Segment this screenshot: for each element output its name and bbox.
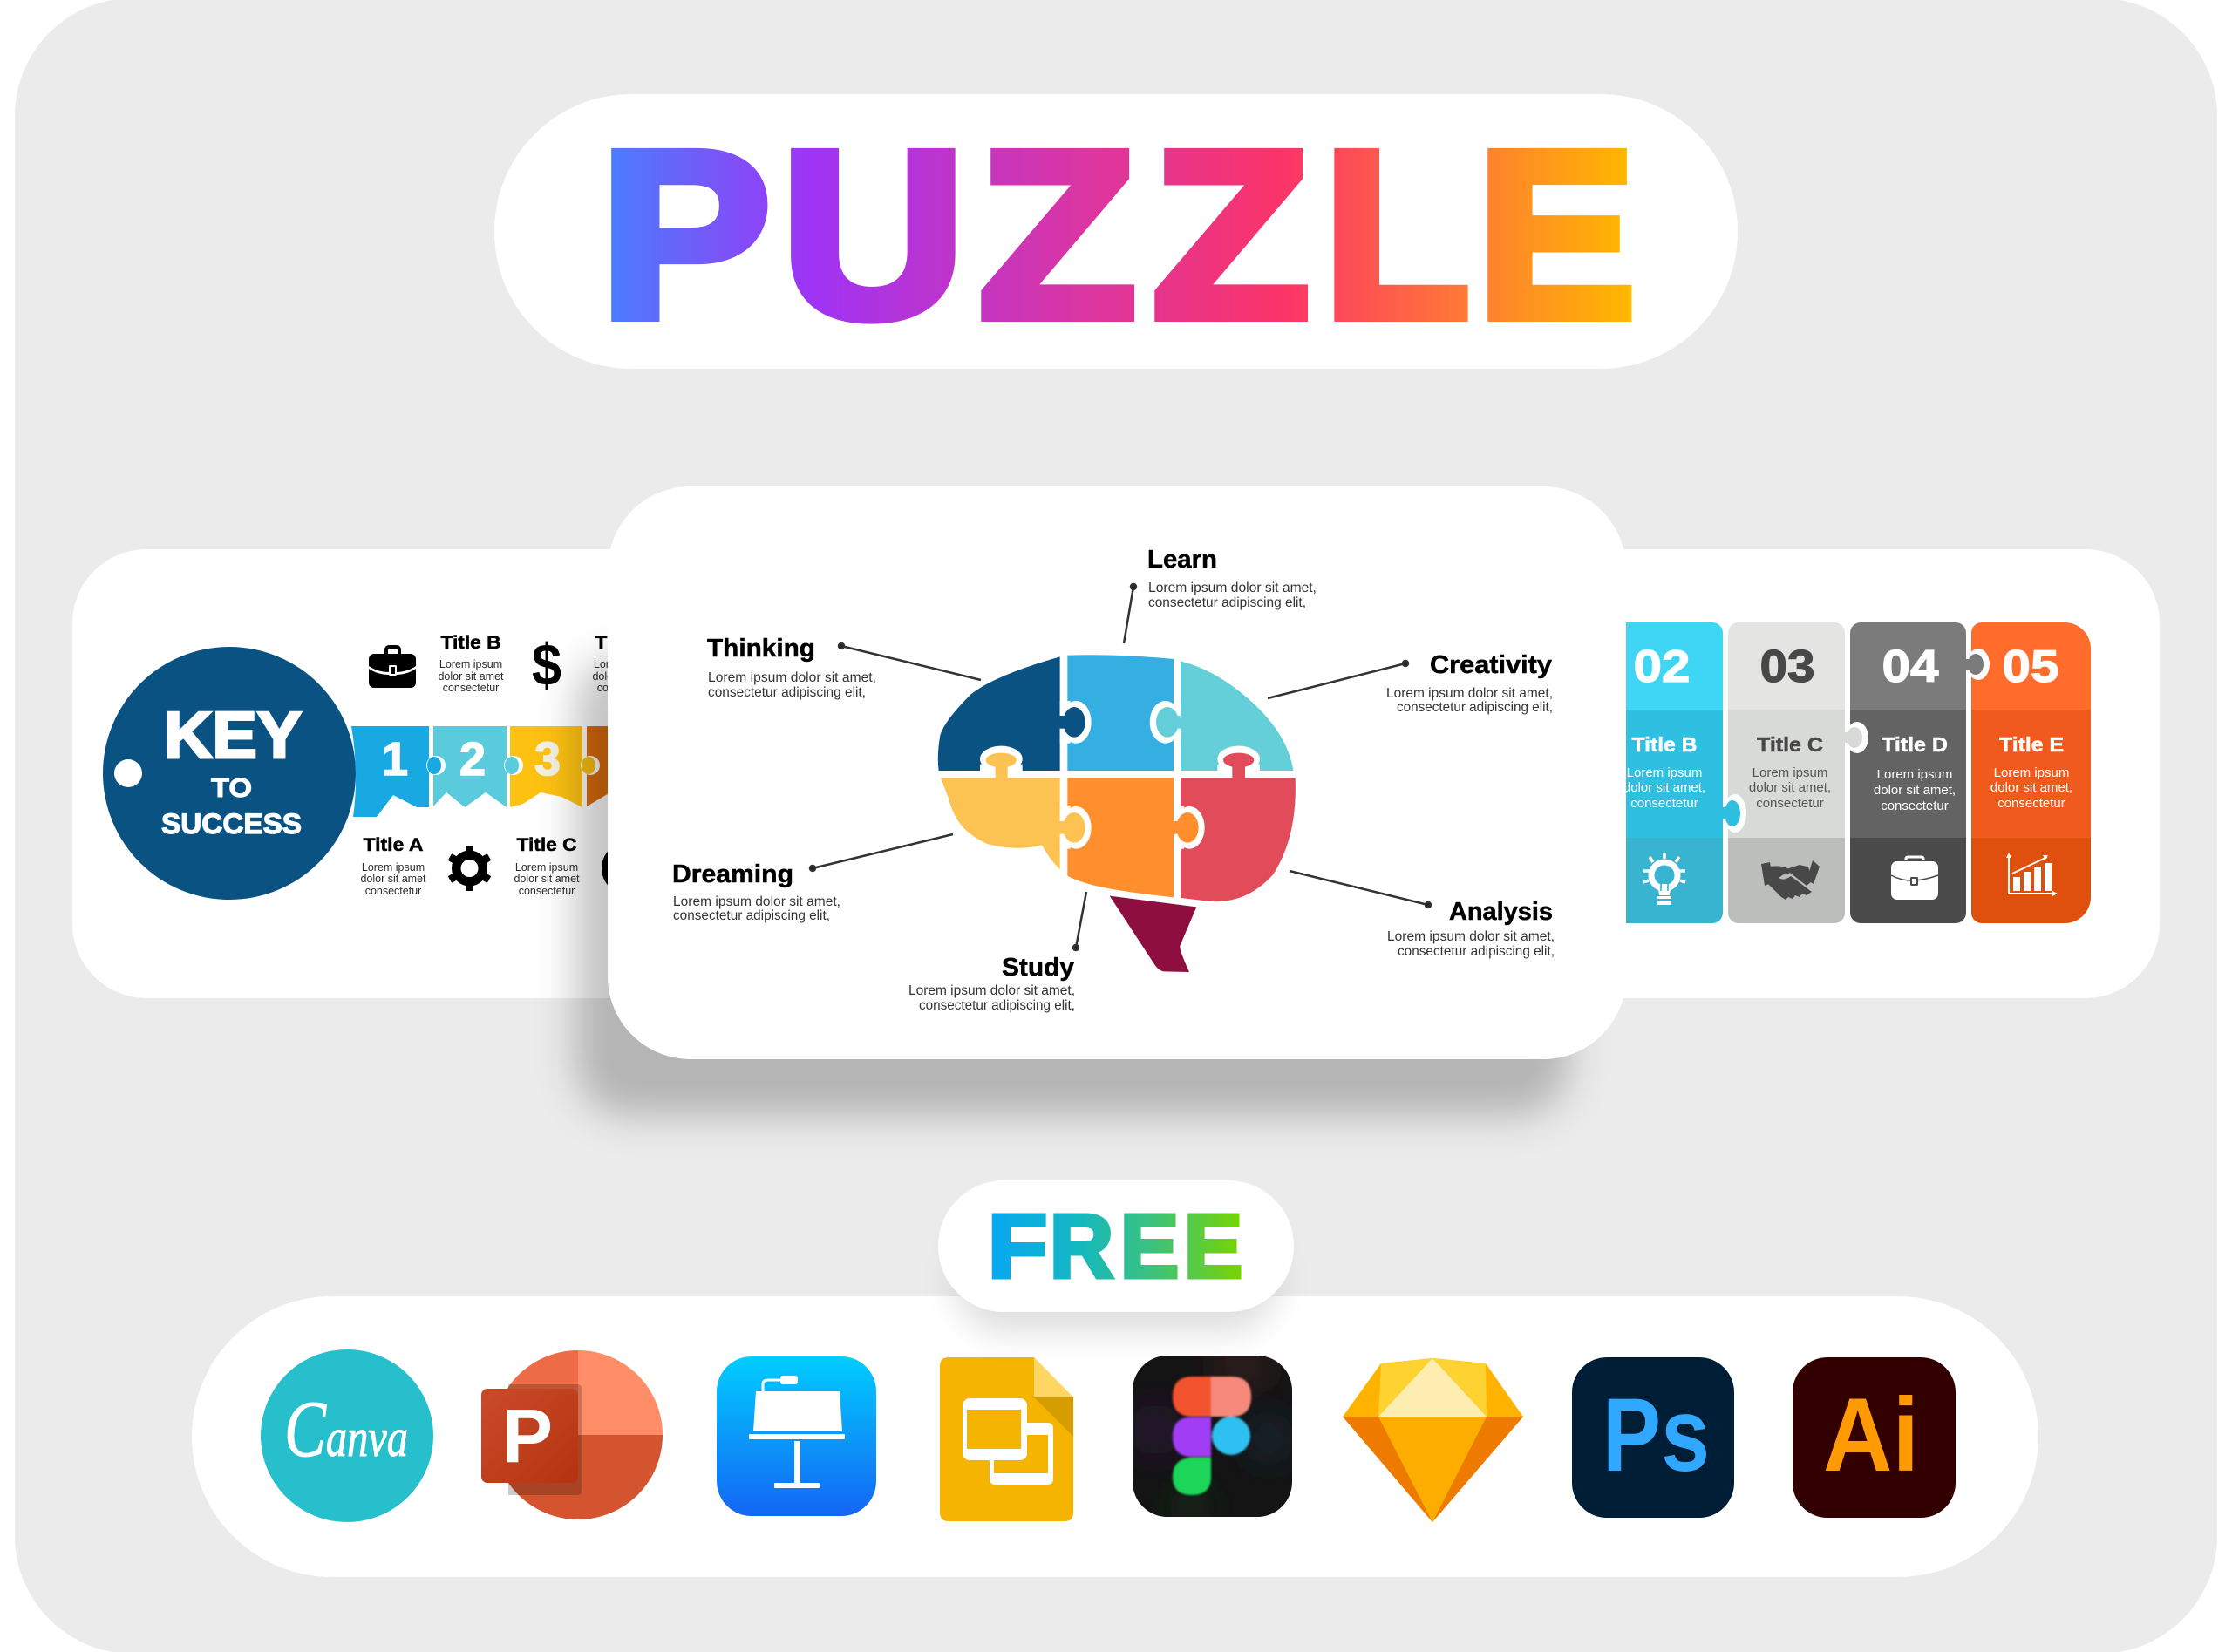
icon: briefcase [369,645,416,688]
text: title B: consectetur [443,682,499,694]
icon: illustrator: Ai [1823,1377,1919,1493]
column 04 [1850,622,1966,923]
column 04: dolor sit amet, [1874,783,1956,798]
text: title B: Title B [441,633,500,653]
key teeth puzzle pieces: 2 [459,733,486,785]
panel: numbered puzzle columns [1395,549,2160,998]
leader lines [810,584,1431,950]
knob 03 to 04 [1843,722,1868,753]
label: study [908,954,1075,1013]
column 05: Title E [1999,733,2064,756]
brain piece: orange [1067,778,1174,897]
text: title A: Title A [363,835,424,855]
column 05: 05 [2002,642,2059,692]
text: title B [438,633,504,694]
label: dreaming: Lorem ipsum dolor sit amet, [673,894,840,909]
icon: sketch [1343,1358,1523,1522]
label: learn: consectetur adipiscing elit, [1148,595,1306,610]
knob: yellow to navy [980,746,1023,780]
column 04: Lorem ipsum [1877,767,1952,782]
text: title A: Lorem ipsum [362,861,425,874]
label: study: consectetur adipiscing elit, [919,998,1075,1013]
icon: dollar: $ [532,632,561,698]
text: title B: Lorem ipsum [439,658,502,670]
text: title D: Lorem ipsum [594,658,657,670]
icon: illustrator [1793,1357,1956,1518]
free pill [938,1180,1294,1312]
column 02: Title B [1632,733,1697,756]
column 05 [1971,622,2091,923]
label: analysis: Lorem ipsum dolor sit amet, [1387,929,1555,944]
column 02: consectetur [1630,796,1698,811]
free label: E [1120,1196,1179,1296]
label: thinking [707,635,876,700]
panel: brain puzzle card [608,486,1626,1059]
text: title B: dolor sit amet [438,670,504,683]
text: title D: Title D [595,633,656,653]
icon: photoshop: Ps [1603,1377,1710,1493]
key head circle: TO [211,772,252,803]
text: title A: dolor sit amet [360,873,426,885]
label: learn: Learn [1147,546,1217,574]
icon: canva [261,1349,433,1522]
label: thinking: Thinking [707,635,815,663]
brain piece: blue [1067,655,1174,771]
column 03: Lorem ipsum [1752,765,1827,780]
icon: bar chart [2006,853,2058,896]
knob: red to teal [1217,746,1260,780]
key teeth puzzle pieces: 1 [382,733,408,785]
label: creativity: consectetur adipiscing elit, [1397,700,1553,715]
text: title C [514,835,580,897]
brain piece: navy [938,656,1060,771]
label: analysis: consectetur adipiscing elit, [1398,944,1555,959]
key head circle [103,647,356,900]
key head circle: KEY [164,698,302,772]
knob: navy to blue [1058,701,1092,744]
icon: partial circle [602,842,654,894]
icon: keynote [717,1356,876,1516]
label: dreaming [672,860,840,923]
brain piece: stem [1110,896,1196,972]
free label: F [988,1196,1047,1296]
free label [988,1196,1242,1296]
panel: key to success [72,549,857,998]
label: creativity: Creativity [1430,651,1552,679]
title: L [1324,102,1470,367]
icon: photoshop [1572,1357,1734,1518]
column 02: Lorem ipsum [1627,765,1702,780]
label: analysis: Analysis [1449,898,1553,926]
column 05: consectetur [1997,796,2065,811]
free label: E [1184,1196,1242,1296]
brain puzzle chart [938,655,1296,972]
knob: yellow to orange [1058,806,1092,849]
icon: google slides [940,1357,1073,1521]
title [600,102,1636,367]
knob: teal to blue [1150,701,1183,744]
label: thinking: Lorem ipsum dolor sit amet, [708,670,876,685]
column 03: dolor sit amet, [1749,780,1831,795]
label: study: Lorem ipsum dolor sit amet, [908,983,1075,998]
text: title C: consectetur [519,885,575,897]
column 03: 03 [1759,642,1815,692]
title: U [781,102,965,367]
text: title C: Title C [516,835,577,855]
brain piece: teal [1181,661,1293,771]
column 02: dolor sit amet, [1623,780,1705,795]
icon: gear [448,846,491,891]
icon: briefcase white [1891,857,1938,900]
free label: R [1050,1196,1113,1296]
text: title A: consectetur [365,885,421,897]
text: title D: dolor sit amet [592,670,658,683]
label: dreaming: consectetur adipiscing elit, [673,908,830,923]
icon: powerpoint [481,1350,663,1519]
brain piece: yellow [941,778,1060,869]
title pill [494,94,1738,369]
column 04: Title D [1882,733,1948,756]
knob 02 to 03 [1721,794,1746,833]
text: title A [360,835,426,897]
label: dreaming: Dreaming [672,860,793,888]
column 04: 04 [1882,642,1939,692]
icon: figma [1133,1356,1292,1517]
icon: canva: Canva [284,1384,408,1473]
label: analysis [1387,898,1555,959]
knob: orange to red [1171,806,1205,849]
text: title C: dolor sit amet [514,873,580,885]
label: study: Study [1002,954,1074,982]
column 03: consectetur [1756,796,1824,811]
column 03: Title C [1757,733,1823,756]
key teeth puzzle pieces: 3 [534,733,561,785]
label: thinking: consectetur adipiscing elit, [708,685,866,700]
column 04: consectetur [1881,799,1949,813]
brain piece: red [1181,778,1296,901]
text: title C: Lorem ipsum [515,861,578,874]
key head circle: SUCCESS [161,808,302,840]
title: P [600,102,771,367]
title: E [1477,102,1636,367]
column 05: Lorem ipsum [1994,765,2069,780]
column 05: dolor sit amet, [1990,780,2072,795]
column 02: 02 [1634,642,1690,692]
icon: light bulb [1643,853,1685,905]
text: title D [592,633,658,694]
icon: powerpoint: P [502,1394,553,1479]
title: Z [979,102,1136,367]
icon: handshake [1761,860,1820,900]
panel: app icons [192,1296,2038,1577]
knob 04 to 05 [1964,649,1990,680]
key teeth puzzle pieces [351,726,628,817]
label: creativity: Lorem ipsum dolor sit amet, [1386,686,1553,701]
label: creativity [1386,651,1553,715]
column 02 [1596,622,1723,923]
center card shadow [575,654,1569,1116]
free pill shadow [955,1229,1277,1332]
text: title D: consectetur [597,682,653,694]
label: learn [1147,546,1317,610]
column 03 [1728,622,1845,923]
label: learn: Lorem ipsum dolor sit amet, [1148,581,1317,595]
title: Z [1153,102,1310,367]
